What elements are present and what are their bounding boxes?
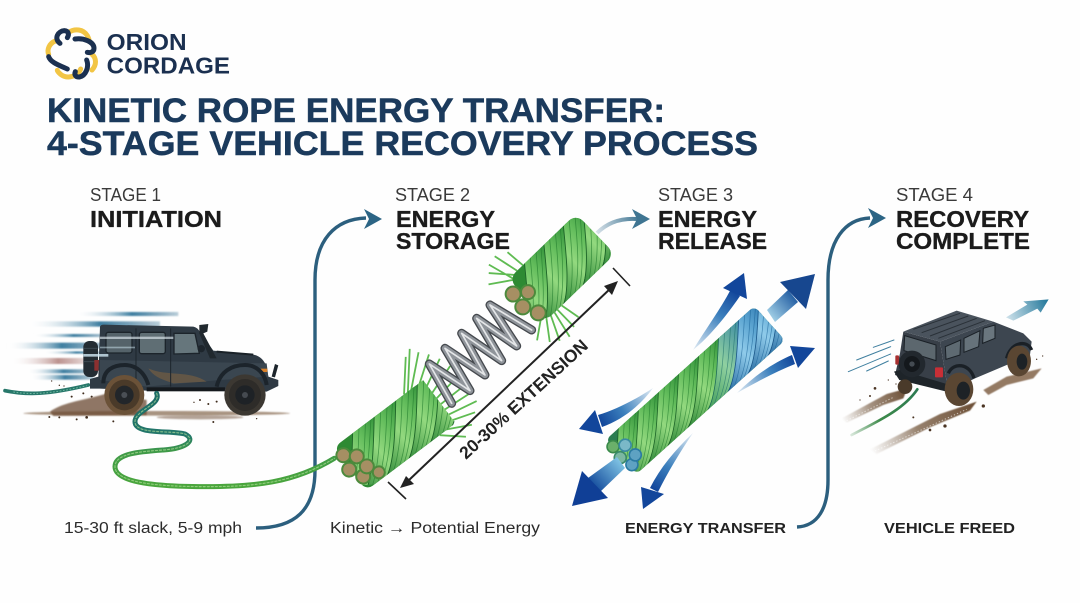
logo <box>48 29 230 78</box>
back blue arrows <box>693 273 815 393</box>
wordmark: ORION <box>107 29 187 55</box>
jeep <box>894 311 1032 392</box>
stage 3 heading: STAGE 3 <box>658 184 733 205</box>
stage 2 heading: ENERGY <box>396 206 495 232</box>
extension dimension arrow: 20-30% EXTENSION <box>455 335 592 463</box>
mud patch <box>23 380 290 423</box>
stage 1 caption: 15-30 ft slack, 5-9 mph <box>64 520 242 537</box>
stage 3 caption: ENERGY TRANSFER <box>625 520 786 537</box>
direction arrow <box>1006 299 1049 321</box>
stage 1 heading: STAGE 1 <box>90 184 161 205</box>
lower rope section <box>335 348 477 488</box>
spring <box>429 305 532 403</box>
arrow: stage 2 to stage 3 <box>597 209 650 233</box>
stage 4 heading <box>896 184 1030 254</box>
title: KINETIC ROPE ENERGY TRANSFER: <box>47 92 665 130</box>
tow rope behind <box>5 385 88 393</box>
stage 2 heading: STORAGE <box>396 228 510 254</box>
spare wheel <box>899 351 925 377</box>
stage 2 heading: STAGE 2 <box>395 184 470 205</box>
stage 2 heading <box>395 184 510 254</box>
slack rope <box>115 393 334 487</box>
speed lines <box>848 340 894 372</box>
front wheel <box>224 374 266 416</box>
stage 2 caption: Kinetic → Potential Energy <box>330 520 540 537</box>
energy rope <box>606 308 783 472</box>
stage 1 heading <box>90 184 222 232</box>
logo mark <box>48 30 95 77</box>
title: 4-STAGE VEHICLE RECOVERY PROCESS <box>47 125 758 163</box>
stage 4 heading: RECOVERY <box>896 206 1029 232</box>
motion streaks <box>7 312 178 380</box>
stage 4 heading: STAGE 4 <box>896 184 973 205</box>
stage 3 heading: ENERGY <box>658 206 757 232</box>
stage 4 heading: COMPLETE <box>896 228 1030 254</box>
rear wheel <box>104 375 144 415</box>
wordmark <box>107 29 230 78</box>
stage 4: freed vehicle <box>842 299 1049 454</box>
tow rope <box>852 389 917 435</box>
arrow: stage 3 to stage 4 <box>797 208 886 527</box>
mud tracks <box>842 355 1043 454</box>
stage 1 heading: INITIATION <box>90 206 222 232</box>
stage 3 heading: RELEASE <box>658 228 767 254</box>
front blue arrows <box>572 388 693 509</box>
stage 4 caption: VEHICLE FREED <box>884 520 1015 537</box>
wordmark: CORDAGE <box>107 52 230 78</box>
jeep body <box>83 324 278 392</box>
extension dimension arrow <box>388 268 630 499</box>
stage 2: stretched rope with spring <box>335 218 630 500</box>
stage 1: vehicle with slack rope <box>5 312 334 487</box>
title <box>47 92 758 163</box>
road wheels <box>898 346 1031 406</box>
upper rope section <box>488 218 611 342</box>
arrow: stage 1 to stage 2 <box>256 209 382 528</box>
stage 3: energy release arrows and rope <box>572 273 815 509</box>
stage 3 heading <box>658 184 767 254</box>
